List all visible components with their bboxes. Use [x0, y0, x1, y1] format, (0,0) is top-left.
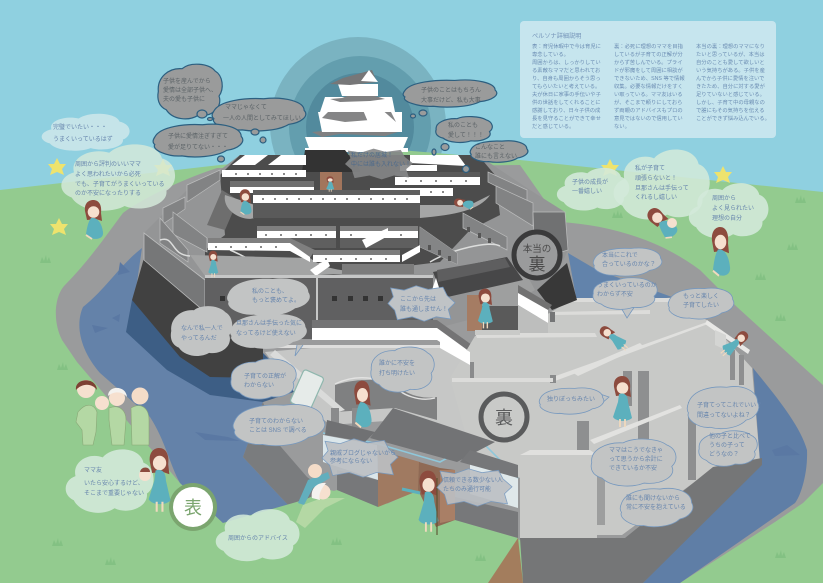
panel: persona detail: る素敵なママだと思われてお [532, 66, 601, 74]
speech bubble: 子育ての正解が [231, 359, 296, 399]
soft cloud: 私が子育て: 旦那さんは手伝って [635, 184, 689, 192]
speech bubble: もっと楽しく: もっと楽しく [683, 292, 719, 300]
speech bubble: 私のことも、もっと褒めてよ: 私のことも、 [252, 287, 288, 295]
soft cloud: 周囲から評判: 周囲から評判のいいママ [75, 160, 141, 168]
soft cloud: 理想の自分: 理想の自分 [712, 214, 742, 222]
thought cloud: こんなこと [462, 141, 528, 172]
speech bubble: 私のことも、もっと褒めてよ: もっと褒めてよ。 [252, 296, 300, 304]
white castle wall rows [222, 155, 480, 196]
thought cloud: ママじゃなくて [212, 98, 306, 143]
right side terraces [450, 300, 760, 538]
small window dots [215, 173, 491, 335]
speech bubble: 子育ての正解が: わからない [244, 382, 274, 389]
soft cloud: 理想の自分: よく見られたい [712, 205, 754, 212]
soft cloud: 子供の成長: 子供の成長が [572, 178, 608, 186]
speech bubble: 子育てのわからないことは [233, 404, 325, 446]
panel: persona detail: できないため、SNS 等で情報 [614, 74, 685, 82]
panel: persona detail: 収集。必要な情報だけをすく [614, 82, 683, 90]
soft cloud: 理想の自分: 周囲から [712, 195, 736, 202]
panel: persona detail: で誰にもその気持ちを伝える [696, 106, 765, 114]
courtyard stairs and path [160, 239, 500, 273]
panel: persona detail [520, 21, 776, 138]
castle plateau [144, 155, 568, 330]
figures in castle [208, 176, 751, 427]
thought cloud: こんなこと: 誰にも言えない [475, 152, 517, 160]
circle label: 本当の裏 [514, 232, 560, 278]
lower castle rows [208, 226, 457, 276]
speech bubble: うまくいっているのか [593, 278, 657, 318]
speech bubble: 誰かに不安を [371, 347, 434, 392]
speech bubble: 他の子と比べて: どうなの？ [709, 450, 739, 458]
speech bubble: 旦那さんは [230, 314, 307, 356]
panel: persona detail: 感謝しており、日々子供の成 [532, 106, 601, 114]
soft cloud: 完璧でいたい [42, 114, 130, 151]
upper right gate walls and black wedge [467, 262, 577, 335]
front wall main [205, 275, 433, 339]
background: grass [0, 150, 823, 583]
circle label: 本当の裏: 裏 [528, 255, 546, 274]
speech bubble: ママはこうでなきゃ: ママはこうでなきゃ [609, 447, 663, 454]
thought cloud: こんなこと: こんなこと [475, 144, 505, 151]
panel: persona detail: 表：育児休暇中で今は育児に [532, 42, 601, 50]
front castle row [253, 190, 420, 196]
panel: persona detail: 意見ではないので信用してい [614, 114, 683, 122]
jagged bubble: 親戚ブログ: 親戚ブログじゃないから [330, 449, 396, 457]
speech bubble: なんで私一人で [171, 306, 232, 356]
speech bubble: 独りぼっちみたい: 独りぼっちみたい [547, 395, 595, 403]
panel: persona detail: てもらいたいと考えている。 [532, 83, 600, 90]
figure: seated left [85, 200, 103, 239]
speech bubble: ママはこうでなきゃ [591, 439, 676, 486]
jagged bubble: ここから先は [388, 286, 455, 321]
halo circles behind castle keep [270, 37, 446, 213]
panel: persona detail: り、自身も周囲からそう思っ [532, 74, 601, 82]
thought cloud: 私のことも愛して [432, 117, 492, 155]
upper dark gatehouse [302, 150, 360, 172]
castle keep [305, 70, 408, 152]
jagged bubble: 信頼できる: 信頼できる数少ない人 [443, 476, 503, 484]
speech bubble: うまくいっているのか: うまくいっているのか [597, 282, 657, 289]
speech bubble: 子育てってこれでいい: 子育てってこれでいい？ [697, 401, 762, 409]
right pillars [577, 330, 744, 480]
裏 block [452, 378, 682, 538]
upper gate roof [432, 257, 523, 298]
soft cloud: 周囲からのアドバイス [216, 509, 300, 561]
panel: persona detail: 裏：必死に理想のママを目指 [614, 42, 684, 50]
speech bubble: 私のことも、もっと褒めてよ [227, 278, 310, 316]
castle foundation navy [126, 300, 300, 402]
speech bubble: 旦那さんは: なってるけど使えない [236, 329, 296, 337]
soft cloud: ママ友: いたら安心するけど、 [84, 479, 144, 487]
gray ground ring [56, 165, 823, 583]
thought cloud: 子供に愛情注ぎすぎて: 子供に愛情注ぎすぎて [168, 132, 228, 140]
thought cloud: 子供を産んでから: 愛情は全部子供へ、 [163, 86, 217, 94]
soft cloud: 周囲から評判: のか不安になったりする [75, 189, 141, 197]
circle label: 裏 [481, 394, 527, 440]
soft cloud: 理想の自分 [689, 183, 768, 238]
thought cloud: 子供を産んでから: 子供を産んでから [163, 77, 211, 85]
jagged bubble: 親戚ブログ: 参考にならない [330, 457, 372, 465]
speech bubble: うまくいっているのか: わからず不安 [597, 290, 633, 298]
jagged bubble: 信頼できる: たちのみ通行可能 [443, 485, 491, 493]
dark path right [520, 458, 762, 583]
figure: running grandparents [296, 464, 345, 528]
soft cloud: 私が子育て: 私が子育て [635, 164, 665, 172]
fish shadows in moat [92, 262, 800, 456]
speech bubble: ママはこうでなきゃ: って思うから余計に [609, 455, 663, 463]
panel: persona detail: 専念している。 [532, 50, 569, 58]
courtyards gray [225, 195, 490, 219]
castle foundation black [132, 258, 263, 378]
speech bubble: 本当にこれで [593, 248, 662, 276]
thought cloud: 子供を産んでから [158, 64, 222, 120]
soft cloud: 周囲からのアドバイス: 周囲からのアドバイス [228, 535, 288, 542]
figure: arms folded right [712, 227, 730, 276]
thought cloud: 子供のことはもちろん: 子供のことはもちろん [421, 86, 481, 94]
jagged bubble: 親戚ブログ [322, 439, 398, 477]
soft cloud: 周囲から評判: でも、子育てがうまくいっている [75, 180, 165, 188]
speech bubble: もっと楽しく: 子育てしたい [683, 301, 719, 309]
speech bubble: 子育てってこれでいい: 間違ってないよね？ [697, 411, 751, 419]
speech bubble: 子育てのわからないことは: 子育てのわからない [249, 417, 303, 425]
speech bubble: 本当にこれで: 本当にこれで [602, 251, 638, 259]
panel: persona detail: ことができず悩み込んでいる。 [696, 114, 770, 122]
moat water right [643, 368, 807, 583]
grass tufts [40, 195, 806, 565]
thought cloud: ママじゃなくて: ママじゃなくて [225, 104, 267, 111]
jagged bubble: 私だけの居城: 私だけの居城！ [351, 151, 393, 159]
speech bubble: 他の子と比べて: 他の子と比べて [709, 432, 751, 440]
white wall segment foreground [440, 335, 470, 365]
window with figure room [320, 172, 342, 192]
white long wall [275, 320, 472, 362]
central dark mass [205, 155, 500, 278]
panel: persona detail: 長を見守ることができて幸せ [532, 114, 601, 122]
panel: persona detail: きたため、自分に対する愛が [696, 82, 766, 90]
figure: phone [290, 369, 324, 411]
panel: persona detail: ドが邪魔をして周囲に相談が [614, 66, 683, 74]
soft cloud: ママ友 [66, 449, 154, 513]
thought cloud: 子供のことはもちろん: 大事だけど、私も大事 [421, 96, 481, 104]
figure: gate guard with staff [402, 471, 438, 535]
speech bubble: ママはこうでなきゃ: できているか不安 [609, 464, 657, 472]
soft cloud: 私が子育て [614, 149, 710, 220]
thought cloud: 子供を産んでから: 夫の愛も子供に [163, 95, 205, 103]
panel: persona detail: しているが子育ての正解が分 [614, 50, 683, 58]
brown path [488, 538, 523, 583]
panel: persona detail: が、そこまで頼りにしておら [614, 98, 682, 106]
speech bubble: 子育てのわからないことは: ことは SNS で調べる [249, 427, 307, 434]
panel: persona detail: んでから子供に愛情を注いで [696, 74, 764, 82]
speech bubble: 誰かに不安を: 誰かに不安を [379, 359, 415, 367]
thought cloud: 子供のことはもちろん [403, 80, 497, 118]
panel: persona detail: 供の世話をしてくれることに [532, 98, 601, 106]
thought cloud: 私のことも愛して: 愛して！！！ [448, 131, 484, 139]
speech bubble: 旦那さんは: 旦那さんは手伝った気に [236, 319, 302, 327]
thought cloud: 私のことも愛して: 私のことも [448, 121, 478, 129]
panel: persona detail: い取っている。ママ友はいる [614, 90, 683, 98]
jagged bubble: ここから先は: 誰も通しません！ [400, 305, 448, 313]
thought cloud: 子供に愛情注ぎすぎて: 愛が足りてない・・・ [168, 143, 228, 151]
front wall left face [144, 233, 205, 312]
panel: persona detail: 本当の裏：理想のママになり [696, 42, 765, 50]
terrace light gray left [265, 345, 470, 450]
moat water upper right [568, 253, 672, 310]
soft cloud: 私が子育て: 頑張らないと！ [635, 175, 677, 182]
soft cloud: ママ友: そこまで重要じゃない [84, 489, 144, 497]
speech bubble: なんで私一人で: なんで私一人で [181, 324, 223, 332]
jagged bubble: 私だけの居城 [345, 149, 413, 179]
panel: persona detail: 足りていないと感じている。 [696, 90, 765, 98]
panel: persona detail: ない。 [614, 123, 630, 130]
lower gate [323, 408, 518, 538]
speech bubble: 誰にも聞けないから [620, 488, 693, 527]
circle label: 裏: 裏 [495, 408, 513, 428]
dark ground slope by gate [243, 402, 325, 507]
panel: persona detail: からず苦しんでいる。プライ [614, 58, 682, 66]
speech bubble: 誰にも聞けないから: 誰にも聞けないから [626, 494, 680, 502]
panel: persona detail: 周囲からは、しっかりしてい [532, 59, 601, 66]
speech bubble: もっと楽しく [668, 288, 734, 319]
castle outer walls [160, 170, 568, 264]
soft cloud: 完璧でいたい: うまくいっているはず [53, 135, 113, 143]
speech bubble: 他の子と比べて [699, 431, 757, 466]
soft cloud: 周囲から評判 [61, 144, 175, 211]
panel: persona detail: だと感じている。 [532, 122, 574, 130]
soft cloud: 周囲から評判: よく思われたいから必死 [75, 170, 141, 178]
figure: mother with baby bottom left [139, 448, 170, 512]
thought cloud: ママじゃなくて: 一人の人間としてみてほしい [223, 115, 301, 122]
bottom grass court [223, 490, 518, 583]
speech bubble: 誰かに不安を: 打ち明けたい [379, 369, 415, 377]
panel: persona detail: たいと思っているが、本当は [696, 50, 765, 58]
moat water left [79, 248, 290, 523]
stars [48, 158, 732, 235]
circle label: 表 [169, 483, 217, 531]
circle label: 表: 表 [184, 498, 202, 518]
soft cloud: ママ友: ママ友 [84, 466, 102, 474]
speech bubble: 本当にこれで: 合っているのかな？ [602, 260, 656, 268]
soft cloud: 子供の成長 [557, 168, 629, 211]
speech bubble: 他の子と比べて: うちの子って [709, 442, 745, 449]
jagged bubble: ここから先は: ここから先は [400, 295, 436, 303]
circle label: 本当の裏: 本当の [523, 243, 551, 255]
soft cloud: 私が子育て: くれるし嬉しい [635, 193, 677, 201]
figure: family group [76, 380, 149, 445]
panel: persona detail: 夫が休日に家事の手伝いや子 [532, 90, 602, 98]
speech bubble: 子育てってこれでいい [687, 387, 762, 429]
jagged bubble: 私だけの居城: 中には誰も入れない！ [351, 160, 411, 168]
panel: persona detail: しかし、子育て中の母親なの [696, 98, 765, 106]
soft cloud: 完璧でいたい: 完璧でいたい・・・ [53, 123, 107, 131]
speech bubble: 子育ての正解が: 子育ての正解が [244, 372, 286, 380]
inner courtyard dark gray [335, 380, 437, 420]
thought cloud: 子供に愛情注ぎすぎて [153, 124, 243, 162]
speech bubble: なんで私一人で: やってるんだ [181, 334, 217, 342]
soft cloud: 子供の成長: 一番嬉しい [572, 187, 602, 195]
jagged bubble: 信頼できる [437, 469, 512, 506]
speech bubble: 独りぼっちみたい [539, 388, 609, 414]
panel: persona detail: ペルソナ詳細説明 [532, 32, 582, 40]
panel: persona detail: いう気持ちがある。子供を産 [696, 66, 766, 74]
figure: mother with baby top right [644, 204, 680, 241]
panel: persona detail: ず両親のアドバイスもプロの [614, 106, 683, 114]
speech bubble: 誰にも聞けないから: 常に不安を抱えている [626, 503, 686, 511]
panel: persona detail: 自分のことも愛して欲しいと [696, 58, 765, 66]
